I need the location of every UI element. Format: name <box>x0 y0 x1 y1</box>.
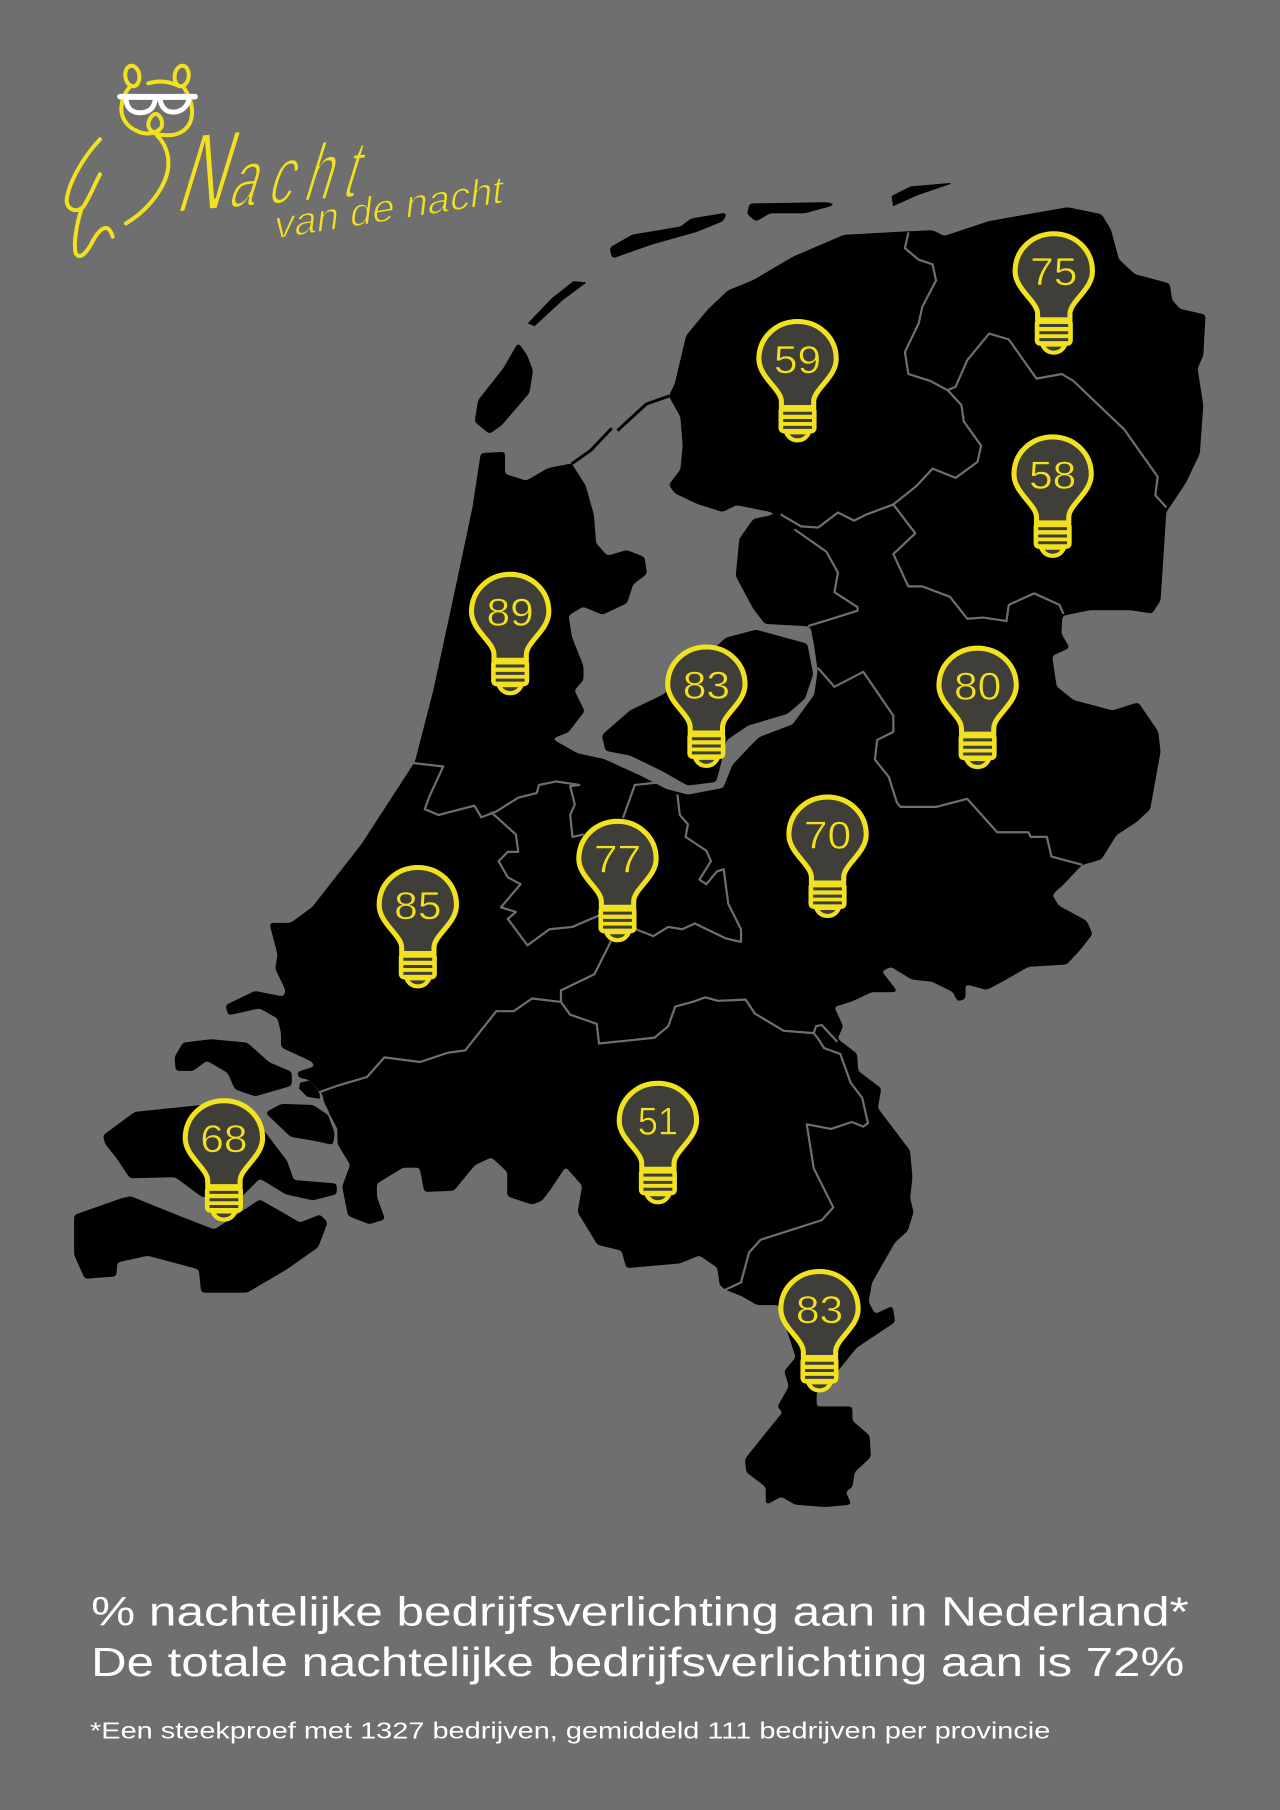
bulb: 51: 51 <box>638 1101 678 1144</box>
island: Vlieland <box>529 282 585 326</box>
bulb: 75 <box>1015 234 1092 353</box>
bulb: 83 Flevoland <box>668 647 745 766</box>
logo: tagline: van de nacht <box>272 168 507 248</box>
land: Afsluitdijk <box>571 396 669 464</box>
bulb: 85: 85 <box>394 885 441 928</box>
bulb: 68 <box>185 1101 263 1220</box>
bulb: 51 <box>619 1083 697 1202</box>
logo: owl drawing <box>67 65 192 256</box>
bulb: 83 Flevoland: 83 <box>683 664 730 707</box>
bulb: 70 <box>789 797 866 916</box>
bulb: 77: 77 <box>594 839 641 882</box>
bulb: 80 <box>939 648 1016 767</box>
logo: glasses <box>120 97 195 113</box>
island: Tholen <box>267 1105 334 1144</box>
bulb: 59 <box>759 321 836 440</box>
island: Goeree-Overflakkee <box>175 1040 291 1095</box>
land masses with softened coastlines <box>75 203 1205 1506</box>
region: Zeeuws-Vlaanderen <box>75 1197 327 1292</box>
heading: second line: De totale nachtelijke bedrijfsverlichting aan is 72% <box>91 1639 1184 1685</box>
bulb: 89 <box>471 574 549 693</box>
bulb: 68: 68 <box>200 1118 248 1161</box>
province borders <box>320 233 1166 1289</box>
logo: Nacht van de nacht <box>67 65 507 256</box>
land: Flevoland <box>602 630 813 785</box>
bulb: 58 <box>1014 437 1091 556</box>
island: Ameland <box>748 203 834 220</box>
bulb: 89: 89 <box>486 592 534 635</box>
island: Walcheren and Beveland <box>104 1106 336 1201</box>
island: Terschelling <box>611 214 726 257</box>
island: small delta island <box>299 1080 320 1099</box>
logo: wordmark: Nacht <box>166 93 397 237</box>
land: mainland provinces <box>226 208 1205 1506</box>
island: Texel <box>476 344 532 433</box>
footnote: *Een steekproef met 1327 bedrijven, gemiddeld 111 bedrijven per provincie <box>90 1717 1050 1743</box>
bulb: 58: 58 <box>1029 454 1076 497</box>
map of the Netherlands <box>75 184 1205 1506</box>
bulb: 77 <box>579 821 656 940</box>
bulb: 83 Limburg: 83 <box>796 1289 843 1332</box>
bulb: 70: 70 <box>804 814 851 857</box>
island: Schiermonnikoog <box>892 184 950 205</box>
heading: first line: % nachtelijke bedrijfsverlichting aan in Nederland* <box>91 1588 1189 1634</box>
bulb: 83 Limburg <box>781 1272 858 1390</box>
bulb: 59: 59 <box>774 339 821 382</box>
bulb: 80: 80 <box>954 666 1001 709</box>
bulb: 75: 75 <box>1030 251 1077 294</box>
bulb: 85 <box>379 867 456 986</box>
